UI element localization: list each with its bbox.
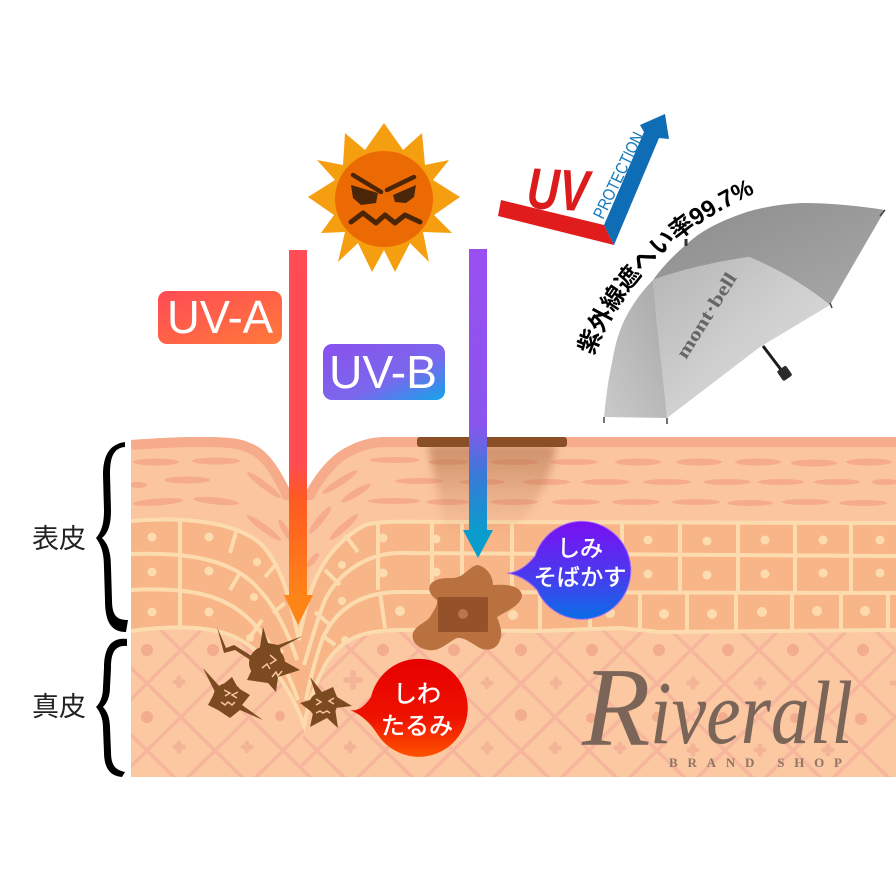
UV protection logo: PROTECTION: [590, 129, 648, 222]
cell layer: [131, 520, 896, 725]
dermis lattice left: [131, 627, 320, 780]
callout: wrinkles and sagging: たるみ: [381, 713, 453, 740]
callout: wrinkles and sagging: しわ: [393, 681, 441, 708]
brace: epidermis: [96, 442, 128, 632]
damaged cell 3: [300, 677, 352, 728]
cell nuclei: [148, 532, 884, 644]
damaged cell 2: [203, 668, 263, 720]
callout: spots and freckles: そばかす: [534, 564, 626, 590]
watermark: Riverall Brand Shop: iverall: [650, 664, 853, 763]
watermark: Riverall Brand Shop: BRAND SHOP: [669, 755, 842, 770]
label: epidermis: 表皮: [32, 524, 86, 554]
label: UV-A: UV-A: [167, 291, 273, 343]
umbrella: [604, 203, 885, 424]
arrow: UV-A: [284, 250, 313, 625]
arrow: UV-B: [463, 249, 493, 558]
spindle cells: [129, 457, 896, 569]
skin cross-section: [129, 430, 896, 780]
callout: spots and freckles: [507, 521, 631, 619]
dermis dots: [141, 644, 869, 725]
brace: dermis: [96, 639, 127, 777]
watermark: Riverall Brand Shop: [581, 646, 853, 770]
melanin band: [417, 437, 567, 447]
callout: wrinkles and sagging: [350, 659, 468, 757]
callout: spots and freckles: しみ: [557, 535, 603, 561]
UV protection logo: [498, 114, 669, 245]
watermark: Riverall Brand Shop: R: [581, 646, 650, 770]
shadow beneath melanin band: [428, 445, 556, 530]
upper epidermis layer: [131, 437, 896, 630]
dermis lattice right: [300, 628, 896, 780]
stratum corneum strip: [131, 437, 896, 490]
label: dermis: 真皮: [32, 692, 86, 722]
dermis flowers: [175, 673, 896, 754]
melanin spot: [413, 565, 522, 650]
dermis: [131, 627, 896, 780]
cell layer lines: [131, 520, 896, 725]
UV protection logo: UV: [525, 156, 594, 224]
curved UV claim text: 紫外線遮へい率99.7%: [576, 180, 754, 356]
angry sun icon: [308, 123, 460, 272]
label: UV-B: UV-B: [329, 346, 437, 398]
damaged cell 1: [217, 627, 303, 692]
umbrella: mont·bell: [672, 269, 742, 363]
